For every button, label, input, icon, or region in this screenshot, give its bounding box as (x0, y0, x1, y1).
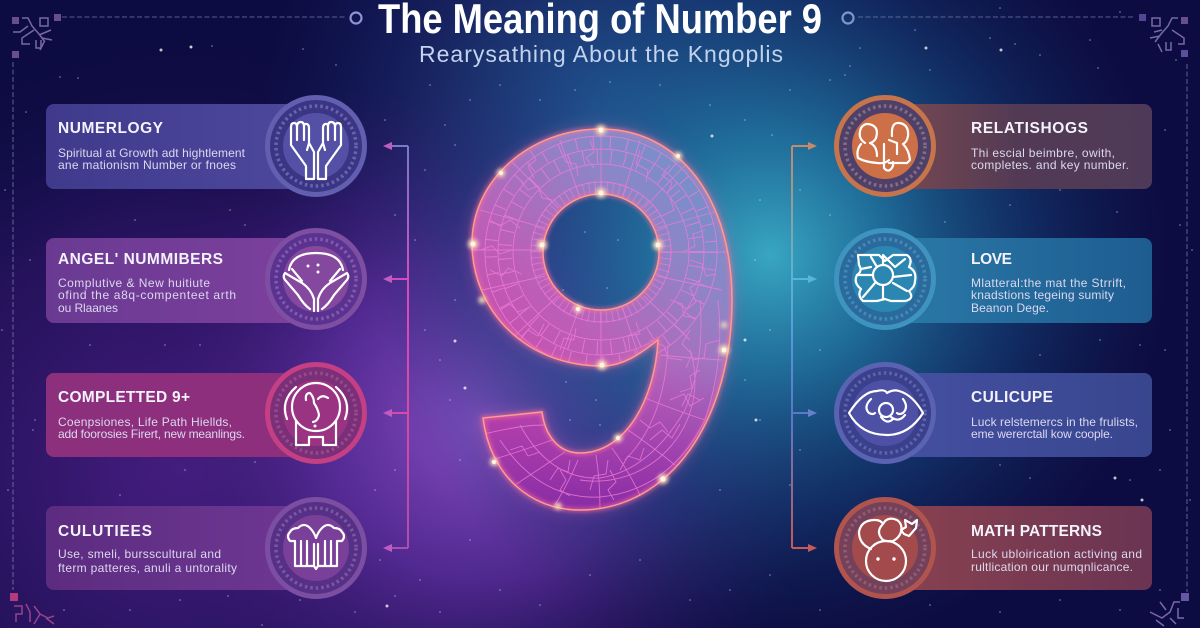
heading: math patterns: MATH PATTERNS (971, 523, 1102, 540)
icon: raised hands badge (268, 98, 364, 194)
text: cultures description: Use, smeli, bursscultural and (58, 547, 221, 561)
heading: love: LOVE (971, 251, 1012, 268)
panel: love (836, 230, 1152, 328)
text: angel numbers description: ofind the a8q-compenteet arth (58, 288, 236, 302)
heading: relationships: RELATISHOGS (971, 120, 1088, 137)
right connector with arrows (792, 142, 817, 552)
icon: circles and star badge (836, 500, 934, 596)
heading: culicupe: CULICUPE (971, 389, 1053, 406)
icon: head with symbol badge (268, 364, 364, 462)
text: math patterns description: rultlication our numqnlicance. (971, 560, 1133, 574)
text: relationships description: completes. and key number. (971, 158, 1129, 172)
icon: mandala star badge (836, 230, 934, 328)
text: angel numbers description: Complutive & New huitiute (58, 276, 210, 290)
icon: cupped hands badge (268, 230, 364, 328)
decorative frame: top left corner circuit (12, 14, 61, 58)
central glowing number 9 (460, 125, 740, 515)
text: love description: Mlatteral:the mat the Strrift, (971, 276, 1126, 290)
text: numerology description: Spiritual at Growth adt hightlement (58, 146, 246, 160)
text: completed 9 description: add foorosies Firert, new meanlings. (58, 427, 245, 441)
left connector with arrows (383, 142, 408, 552)
panel: math patterns (836, 500, 1152, 596)
icon: temple columns badge (268, 500, 364, 596)
panel: culicupe (836, 364, 1152, 462)
decorative frame: bottom left corner circuit (10, 593, 54, 624)
title ornament: left ring (350, 12, 362, 24)
heading: completed 9: COMPLETTED 9+ (58, 389, 190, 406)
title ornament: right ring (842, 12, 854, 24)
text: culicupe description: Luck relstemercs in the frulists, (971, 415, 1138, 429)
text: math patterns description: Luck ubloirication activing and (971, 547, 1142, 561)
panel: completed 9 (46, 364, 364, 462)
text: love description: knadstions tegeing sumity (971, 288, 1114, 302)
heading: angel numbers: ANGEL' NUMMIBERS (58, 251, 223, 268)
panel: numerology (46, 98, 364, 194)
heading: cultures: CULUTIEES (58, 523, 152, 540)
panel: relationships (836, 98, 1152, 194)
text: cultures description: fterm patteres, anuli a untorality (58, 561, 237, 575)
decorative frame: top right corner circuit (1139, 14, 1188, 57)
text: relationships description: Thi escial beimbre, owith, (971, 146, 1115, 160)
text: love description: Beanon Dege. (971, 301, 1049, 315)
text: angel numbers description: ou Rlaanes (58, 301, 118, 315)
panel: angel numbers (46, 230, 364, 328)
icon: two people badge (836, 98, 934, 194)
decorative frame: bottom right corner circuit (1150, 593, 1189, 626)
text: completed 9 description: Coenpsiones, Life Path Hiellds, (58, 415, 232, 429)
panel: cultures (46, 500, 364, 596)
heading: numerology: NUMERLOGY (58, 120, 164, 137)
subtitle: Rearysathing About the Kngoplis (419, 41, 783, 67)
text: numerology description: ane mationism Number or fnoes (58, 158, 236, 172)
text: culicupe description: eme wererctall kow coople. (971, 427, 1113, 441)
icon: eye badge (836, 364, 934, 462)
